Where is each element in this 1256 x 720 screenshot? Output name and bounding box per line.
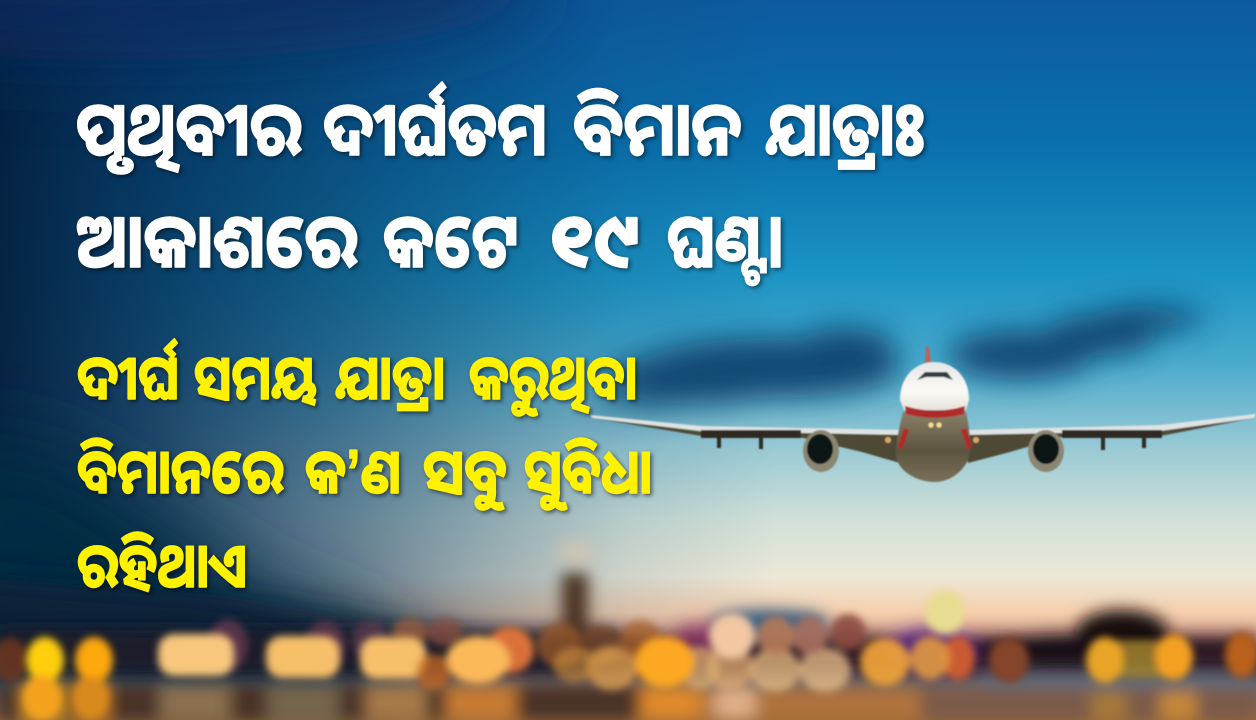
subtitle line 1: ଦୀର୍ଘ — [77, 338, 179, 413]
title line 2: ଘଣ୍ଟା — [667, 199, 783, 286]
left wing — [592, 418, 905, 463]
dark top-left corner — [0, 0, 540, 60]
subtitle line 3: ରହିଥାଏ — [77, 532, 247, 601]
horizon band — [0, 540, 1256, 672]
subtitle line 2 — [77, 438, 652, 511]
subtitle line 2: ସୁବିଧା — [524, 438, 652, 511]
tail fin — [925, 347, 931, 364]
title line 2: କଟେ — [383, 199, 519, 283]
title line 1: ବିମାନ — [573, 87, 742, 171]
title line 1: ପୃଥିବୀର — [76, 87, 302, 174]
title line 2: ଆକାଶରେ — [76, 199, 358, 283]
icon: airplane — [581, 347, 1256, 482]
title line 2: ୧୯ — [549, 199, 639, 283]
title line 1: ଯାତ୍ରାଃ — [765, 87, 925, 171]
title line 1 — [76, 81, 925, 174]
subtitle line 1: ସମୟ — [194, 344, 317, 413]
subtitle line 1 — [77, 338, 637, 417]
subtitle line 2: ବିମାନରେ — [77, 438, 284, 507]
subtitle line 2: ସବୁ — [423, 438, 507, 511]
title line 2 — [76, 199, 783, 286]
title line 1: ଦୀର୍ଘତମ — [323, 81, 547, 171]
reflections on water — [0, 672, 1256, 720]
flap fairings — [701, 430, 1162, 450]
cockpit windows — [917, 372, 953, 380]
bokeh lights — [24, 590, 1256, 719]
fuselage — [896, 412, 970, 482]
left wingtip — [581, 403, 590, 415]
subtitle line 1: ଯାତ୍ରା — [335, 344, 445, 413]
subtitle line 1: କରୁଥିବା — [469, 344, 637, 417]
clouds — [590, 306, 1205, 414]
subtitle line 2: କ’ଣ — [305, 438, 401, 507]
lower-left dark land — [0, 430, 390, 680]
right wing — [965, 418, 1254, 463]
engines — [803, 430, 839, 472]
bokeh lights: background ring — [0, 618, 660, 682]
